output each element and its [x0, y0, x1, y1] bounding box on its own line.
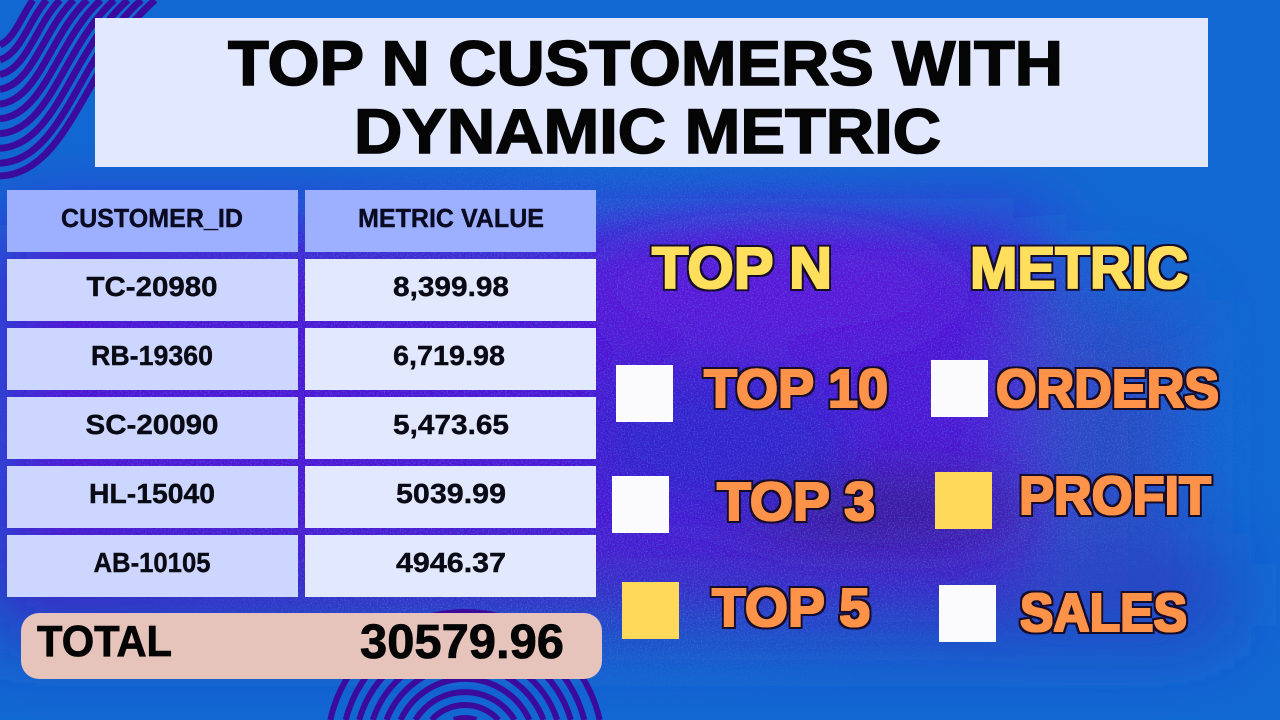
title: TOP N CUSTOMERS WITH	[228, 29, 1063, 99]
row 5: 4946.37	[396, 547, 506, 578]
row 1: TC-20980	[86, 271, 218, 302]
row 4	[7, 466, 596, 528]
option: top 5 selected	[622, 578, 870, 639]
heading: top n: TOP N	[652, 236, 832, 301]
option: sales: SALES	[1020, 583, 1187, 643]
row 2: RB-19360	[91, 340, 213, 371]
table header	[7, 190, 596, 252]
table header: METRIC VALUE	[358, 203, 544, 233]
heading: metric: METRIC	[970, 236, 1188, 301]
total bar: 30579.96	[360, 616, 564, 669]
row 3: 5,473.65	[393, 409, 509, 440]
title: DYNAMIC METRIC	[354, 97, 941, 167]
option: top 10	[616, 359, 888, 422]
title	[95, 18, 1208, 167]
decorative curves: bottom center	[330, 612, 600, 720]
row 5	[7, 535, 596, 597]
total bar: TOTAL	[37, 617, 172, 666]
option: top 5 selected: TOP 5	[712, 578, 870, 638]
option: top 10: TOP 10	[704, 359, 888, 419]
option: orders: ORDERS	[996, 359, 1219, 419]
option: profit selected	[935, 466, 1211, 529]
row 5: AB-10105	[94, 547, 210, 578]
row 1: 8,399.98	[393, 271, 509, 302]
decorative curves: top left	[0, 0, 155, 176]
row 4: HL-15040	[89, 478, 215, 509]
row 3: SC-20090	[86, 409, 218, 440]
option: sales	[939, 583, 1187, 643]
total bar	[21, 613, 602, 679]
row 4: 5039.99	[396, 478, 506, 509]
option: profit selected: PROFIT	[1019, 466, 1211, 526]
row 3	[7, 397, 596, 459]
table header: CUSTOMER_ID	[61, 203, 243, 233]
row 1	[7, 259, 596, 321]
option: top 3: TOP 3	[717, 472, 875, 532]
option: top 3	[612, 472, 875, 533]
row 2: 6,719.98	[393, 340, 505, 371]
data table	[7, 190, 596, 597]
row 2	[7, 328, 596, 390]
